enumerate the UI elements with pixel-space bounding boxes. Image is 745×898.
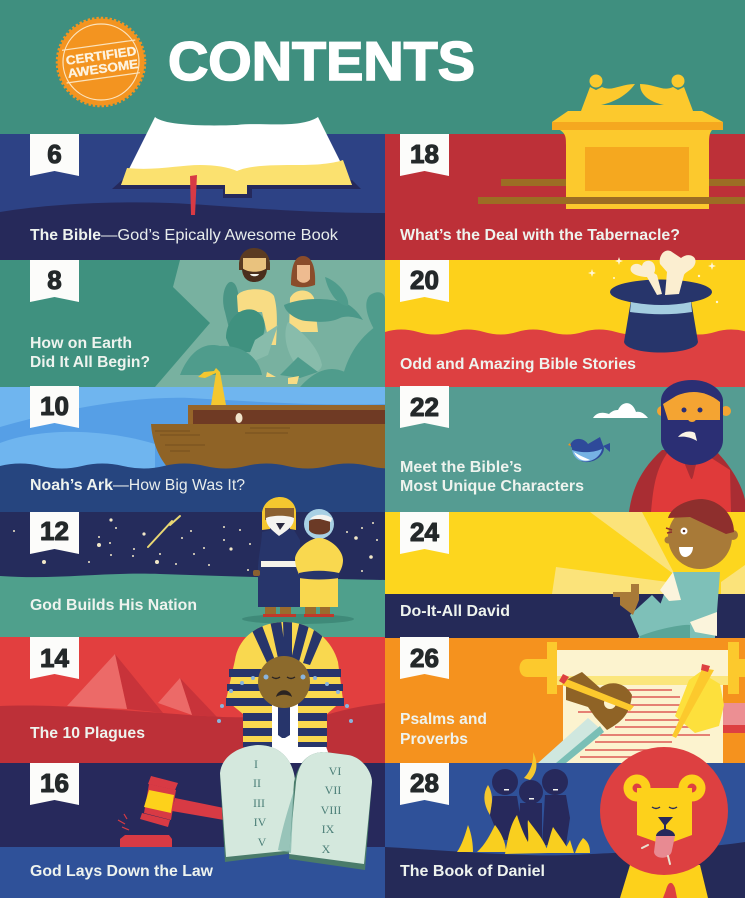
figure: abraham — [253, 497, 300, 617]
figure: adam — [237, 248, 277, 345]
icon: ark of the covenant — [478, 74, 745, 209]
illustration: young david — [613, 499, 738, 638]
badge: 28: 28 — [410, 768, 439, 798]
figure: sarah — [295, 509, 343, 617]
header band — [0, 0, 745, 135]
badge: 18 — [400, 134, 449, 176]
illustration: ark with giraffe — [151, 368, 385, 470]
panel: tabernacle, page 18 — [385, 74, 745, 260]
illustration: ten commandments tablets: VIII — [321, 803, 341, 817]
text: noah's ark heading — [30, 477, 245, 494]
text: noah's ark heading: —How Big Was It? — [113, 477, 245, 494]
illustration: crying pharaoh — [217, 620, 353, 763]
badge: certified awesome: AWESOME — [67, 57, 139, 81]
text: creation heading: Did It All Begin? — [30, 354, 150, 371]
panel: god lays down the law, page 16 — [0, 745, 385, 898]
illustration: ten commandments tablets: III — [253, 796, 265, 810]
text: unique characters heading: Meet the Bible’s — [400, 459, 522, 476]
illustration: ten commandments tablets: II — [253, 776, 261, 790]
badge: 24 — [400, 512, 449, 554]
text: the bible heading: The Bible — [30, 227, 101, 244]
icon: open bible — [112, 117, 361, 215]
text: plagues heading: The 10 Plagues — [30, 725, 145, 742]
badge: 8 — [30, 260, 79, 302]
text: creation heading — [30, 335, 150, 371]
text: david heading: Do-It-All David — [400, 603, 510, 620]
panel: odd stories, page 20 — [385, 251, 745, 387]
badge: 12: 12 — [40, 516, 69, 546]
icon: magic hat with bones — [588, 251, 718, 352]
figure: eve — [289, 256, 318, 332]
icon: gavel — [118, 776, 224, 847]
illustration: men in the furnace — [457, 752, 590, 854]
badge: 18: 18 — [410, 139, 439, 169]
badge: 14 — [30, 637, 79, 679]
badge: 10: 10 — [40, 391, 69, 421]
illustration: ten commandments tablets — [220, 745, 372, 870]
badge: 14: 14 — [40, 643, 69, 673]
badge: 10 — [30, 386, 79, 428]
illustration: ten commandments tablets: I — [254, 757, 258, 771]
illustration: ten commandments tablets: IX — [322, 822, 335, 836]
illustration: ten commandments tablets: IV — [254, 815, 267, 829]
badge: 22 — [400, 386, 449, 428]
badge: 20 — [400, 260, 449, 302]
stars — [13, 518, 378, 572]
left arm and hand — [538, 672, 634, 763]
text: psalms heading — [400, 711, 487, 748]
text: unique characters heading: Most Unique Characters — [400, 478, 584, 495]
panel: god builds his nation, page 12 — [0, 497, 385, 637]
text: the bible heading: —God’s Epically Awesome Book — [101, 227, 339, 244]
badge: 22: 22 — [410, 392, 439, 422]
illustration: adam and eve in the garden — [155, 248, 385, 387]
illustration: ten commandments tablets: V — [258, 835, 267, 849]
illustration: bearded man — [629, 380, 745, 512]
icon: pyramids — [67, 654, 217, 717]
badge: 26 — [400, 637, 449, 679]
badge: 28 — [400, 763, 449, 805]
illustration: scroll and writing hands — [520, 642, 745, 763]
rays — [552, 512, 745, 594]
text: creation heading: How on Earth — [30, 335, 132, 352]
text: psalms heading: Psalms and — [400, 711, 487, 728]
text: nation heading: God Builds His Nation — [30, 597, 197, 614]
panel: unique characters, page 22 — [385, 380, 745, 512]
badge: 26: 26 — [410, 643, 439, 673]
text: unique characters heading — [400, 459, 584, 495]
badge: 20: 20 — [410, 265, 439, 295]
badge: 8: 8 — [47, 265, 62, 295]
text: noah's ark heading: Noah’s Ark — [30, 477, 113, 494]
text: psalms heading: Proverbs — [400, 731, 468, 748]
illustration: abraham and sarah — [242, 497, 354, 624]
badge: certified awesome — [57, 18, 145, 106]
text: tabernacle heading: What’s the Deal with the Tabernacle? — [400, 227, 680, 244]
panel: psalms and proverbs, page 26 — [385, 637, 745, 763]
panel: the book of daniel, page 28 — [385, 747, 745, 898]
text: daniel heading: The Book of Daniel — [400, 863, 545, 880]
panel: the 10 plagues, page 14 — [0, 620, 385, 763]
badge: 12 — [30, 512, 79, 554]
illustration: ten commandments tablets: VII — [325, 783, 341, 797]
badge: 24: 24 — [410, 517, 439, 547]
text: odd stories heading: Odd and Amazing Bible Stories — [400, 356, 636, 373]
right hand and pencil — [672, 664, 724, 738]
panel: david, page 24 — [385, 499, 745, 638]
badge: certified awesome: CERTIFIED — [65, 44, 137, 68]
illustration: lion — [600, 747, 728, 898]
illustration: ten commandments tablets: X — [322, 842, 331, 856]
badge: 6 — [30, 134, 79, 176]
badge: 16 — [30, 763, 79, 805]
icon: bird — [568, 437, 610, 462]
badge: 16: 16 — [40, 768, 69, 798]
illustration: ten commandments tablets: VI — [329, 764, 341, 778]
icon: cloud — [593, 403, 648, 418]
badge: 6: 6 — [47, 139, 62, 169]
panel: the bible, page 6 — [0, 117, 385, 260]
panel: creation, page 8 — [0, 248, 385, 387]
panel: noah's ark, page 10 — [0, 368, 410, 512]
title: CONTENTS — [168, 30, 475, 92]
text: law heading: God Lays Down the Law — [30, 863, 214, 880]
icon: shooting star — [148, 516, 180, 547]
